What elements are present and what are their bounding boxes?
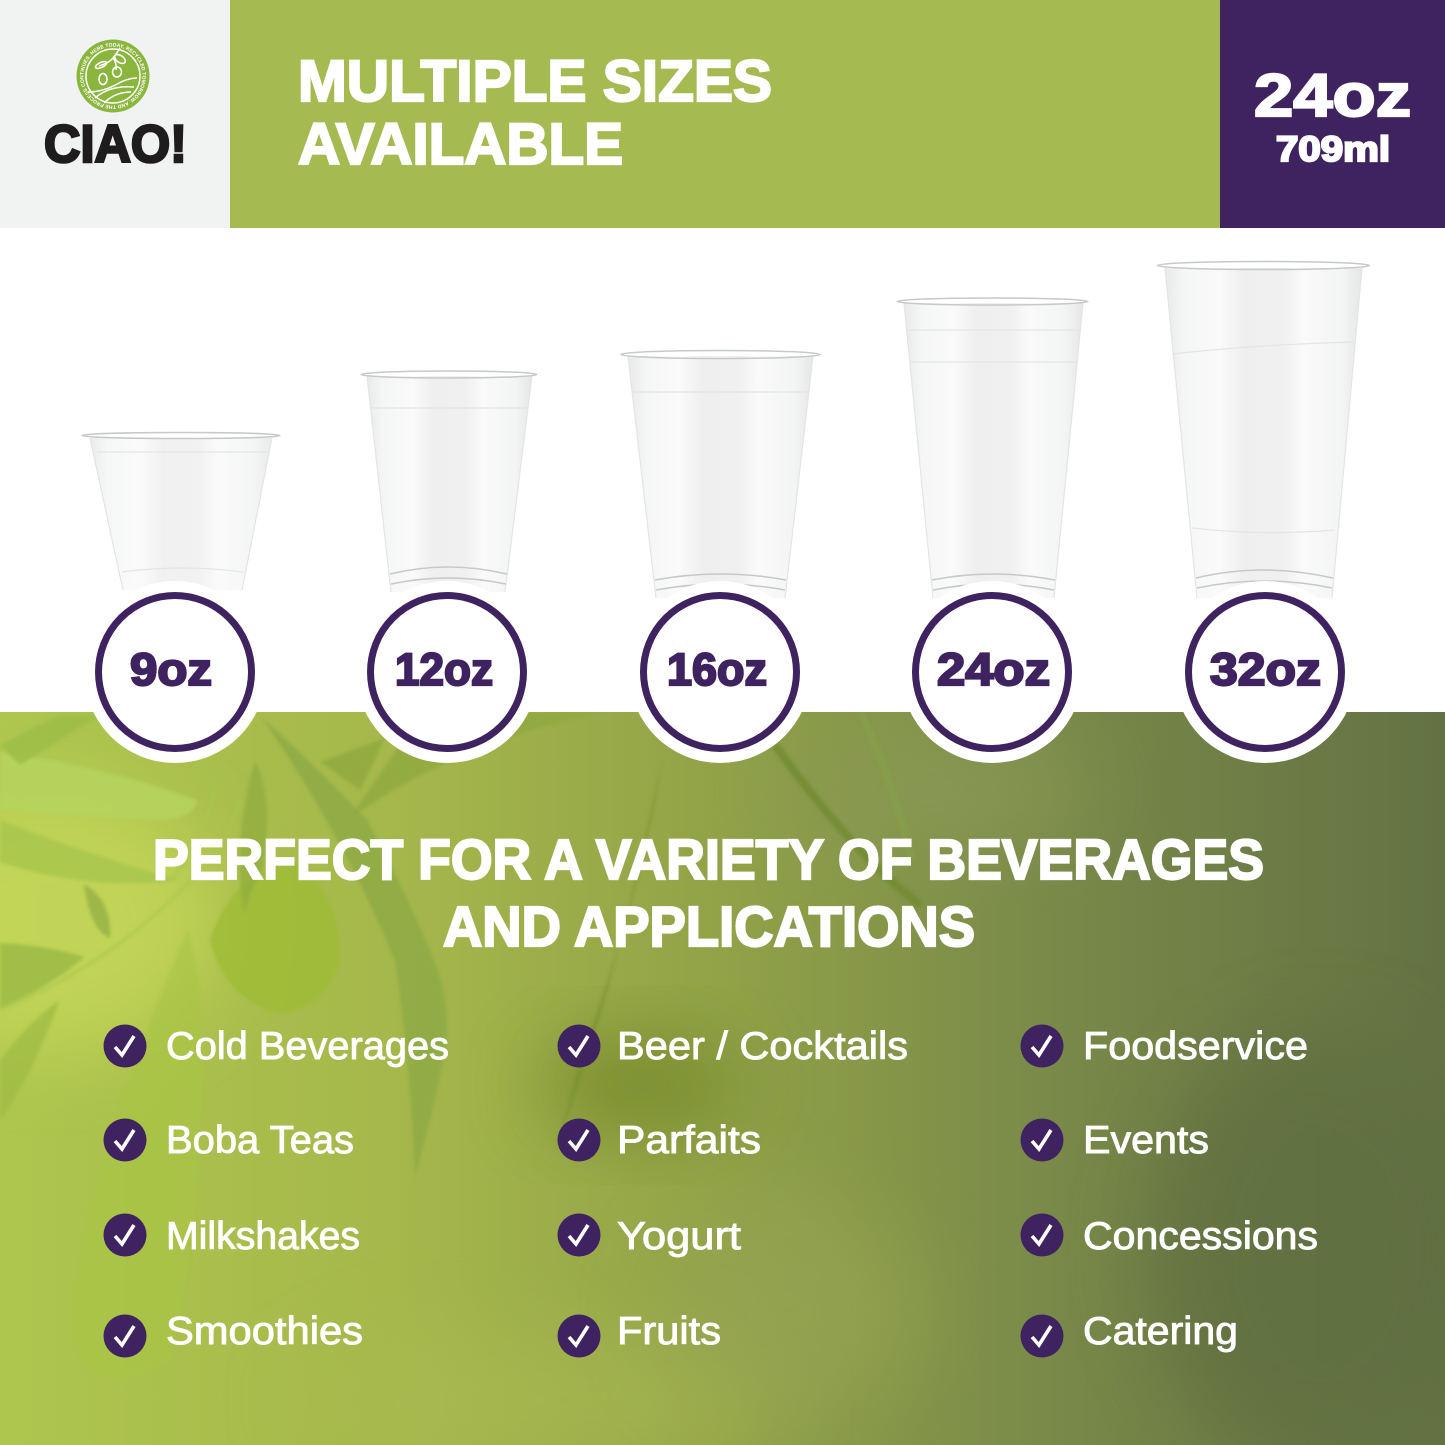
heading: applications: PERFECT FOR A VARIETY OF BEVERAGES (153, 828, 1264, 892)
item: Cold Beverages: Cold Beverages (166, 1025, 449, 1068)
heading: applications: AND APPLICATIONS (443, 895, 975, 959)
item: Smoothies (104, 1310, 363, 1358)
item: Fruits: Fruits (617, 1310, 721, 1353)
header: selected size panel: 24oz (1254, 62, 1411, 129)
list: column 1 (104, 1024, 449, 1358)
list: column 2 (558, 1024, 908, 1358)
item: Concessions: Concessions (1083, 1215, 1318, 1258)
item: Events (1020, 1118, 1209, 1162)
item: Catering: Catering (1083, 1310, 1238, 1353)
title (298, 49, 772, 177)
item: Events: Events (1083, 1119, 1209, 1162)
size badge: 9oz: 9oz (130, 644, 212, 695)
size badge: 9oz (84, 581, 266, 763)
size badge: 16oz: 16oz (667, 644, 767, 695)
item: Boba Teas: Boba Teas (166, 1119, 354, 1162)
header: logo panel (0, 0, 230, 228)
item: Fruits (558, 1310, 721, 1358)
title: AVAILABLE (298, 112, 623, 177)
item: Milkshakes: Milkshakes (166, 1215, 360, 1258)
brand name: CIAO! (44, 115, 187, 174)
header: selected size panel (1220, 0, 1445, 228)
cup: 32oz (1158, 262, 1370, 598)
leaves and olive (0, 713, 922, 1170)
title: MULTIPLE SIZES (298, 49, 772, 114)
panel: leafy green background (0, 712, 1445, 1445)
header: selected size panel: 709ml (1276, 130, 1390, 169)
size badge: 32oz: 32oz (1210, 644, 1321, 695)
size badge: 32oz (1174, 581, 1356, 763)
size badge: 24oz: 24oz (937, 644, 1050, 695)
item: Parfaits: Parfaits (617, 1119, 761, 1162)
icon: olive logo badge: HERE TODAY, RECYCLED TOMORROW. AND THE PROCESS CONTINUES. (80, 43, 146, 109)
size badge: 12oz (356, 581, 538, 763)
size badge: 16oz (629, 581, 811, 763)
item: Foodservice: Foodservice (1083, 1025, 1308, 1068)
header: title panel (230, 0, 1220, 228)
item: Beer / Cocktails: Beer / Cocktails (617, 1025, 908, 1068)
item: Yogurt (558, 1214, 741, 1258)
size badge: 24oz (901, 581, 1083, 763)
item: Yogurt: Yogurt (617, 1215, 741, 1258)
cup: 16oz (621, 350, 820, 598)
item: Parfaits (558, 1118, 761, 1162)
list: column 3 (1020, 1024, 1318, 1358)
item: Smoothies: Smoothies (166, 1310, 363, 1353)
size badge: 12oz: 12oz (395, 644, 493, 695)
heading: applications (153, 828, 1264, 959)
cup: 9oz (82, 432, 280, 590)
cup: 24oz (897, 298, 1088, 598)
cup: 12oz (361, 371, 537, 592)
item: Catering (1020, 1310, 1238, 1358)
